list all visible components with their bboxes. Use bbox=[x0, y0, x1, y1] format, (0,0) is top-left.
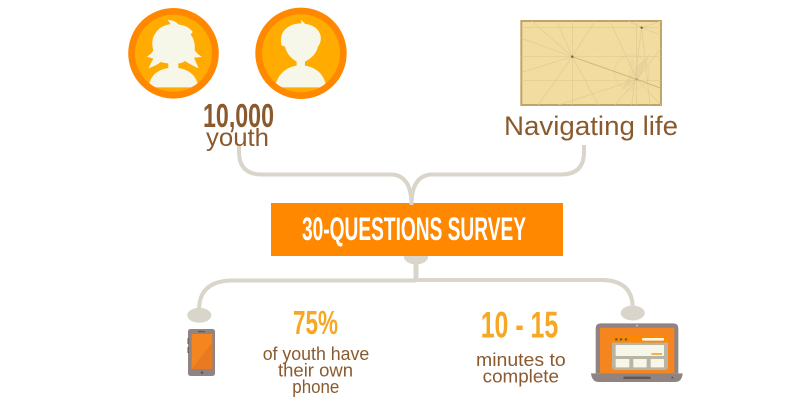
text: phone ownership bbox=[263, 344, 369, 397]
text: completion time: complete bbox=[483, 367, 559, 387]
text: phone ownership: of youth have bbox=[263, 344, 369, 364]
text: completion time: minutes to bbox=[476, 350, 566, 370]
icon: phone bbox=[188, 329, 215, 376]
infographic canvas bbox=[128, 8, 683, 397]
banner: survey: 30-QUESTIONS SURVEY bbox=[302, 211, 526, 247]
icon: girl avatar bbox=[128, 8, 219, 99]
label: Navigating life: Navigating life bbox=[504, 111, 678, 141]
stat: 10 - 15: 10 - 15 bbox=[481, 305, 558, 346]
text: phone ownership: phone bbox=[292, 377, 339, 397]
icon: map bbox=[521, 21, 661, 105]
compass rose bbox=[622, 55, 650, 90]
heading: 10,000: 10,000 bbox=[203, 97, 274, 134]
icon: boy avatar bbox=[255, 8, 347, 99]
stat: 75%: 75% bbox=[293, 304, 338, 341]
banner: survey bbox=[271, 196, 563, 256]
text: completion time bbox=[476, 350, 566, 387]
connector: inputs to survey bbox=[239, 145, 584, 205]
connector: survey to details bbox=[187, 250, 645, 323]
text: phone ownership: their own bbox=[278, 361, 353, 381]
label: youth: youth bbox=[206, 124, 269, 152]
icon: laptop bbox=[591, 323, 683, 382]
